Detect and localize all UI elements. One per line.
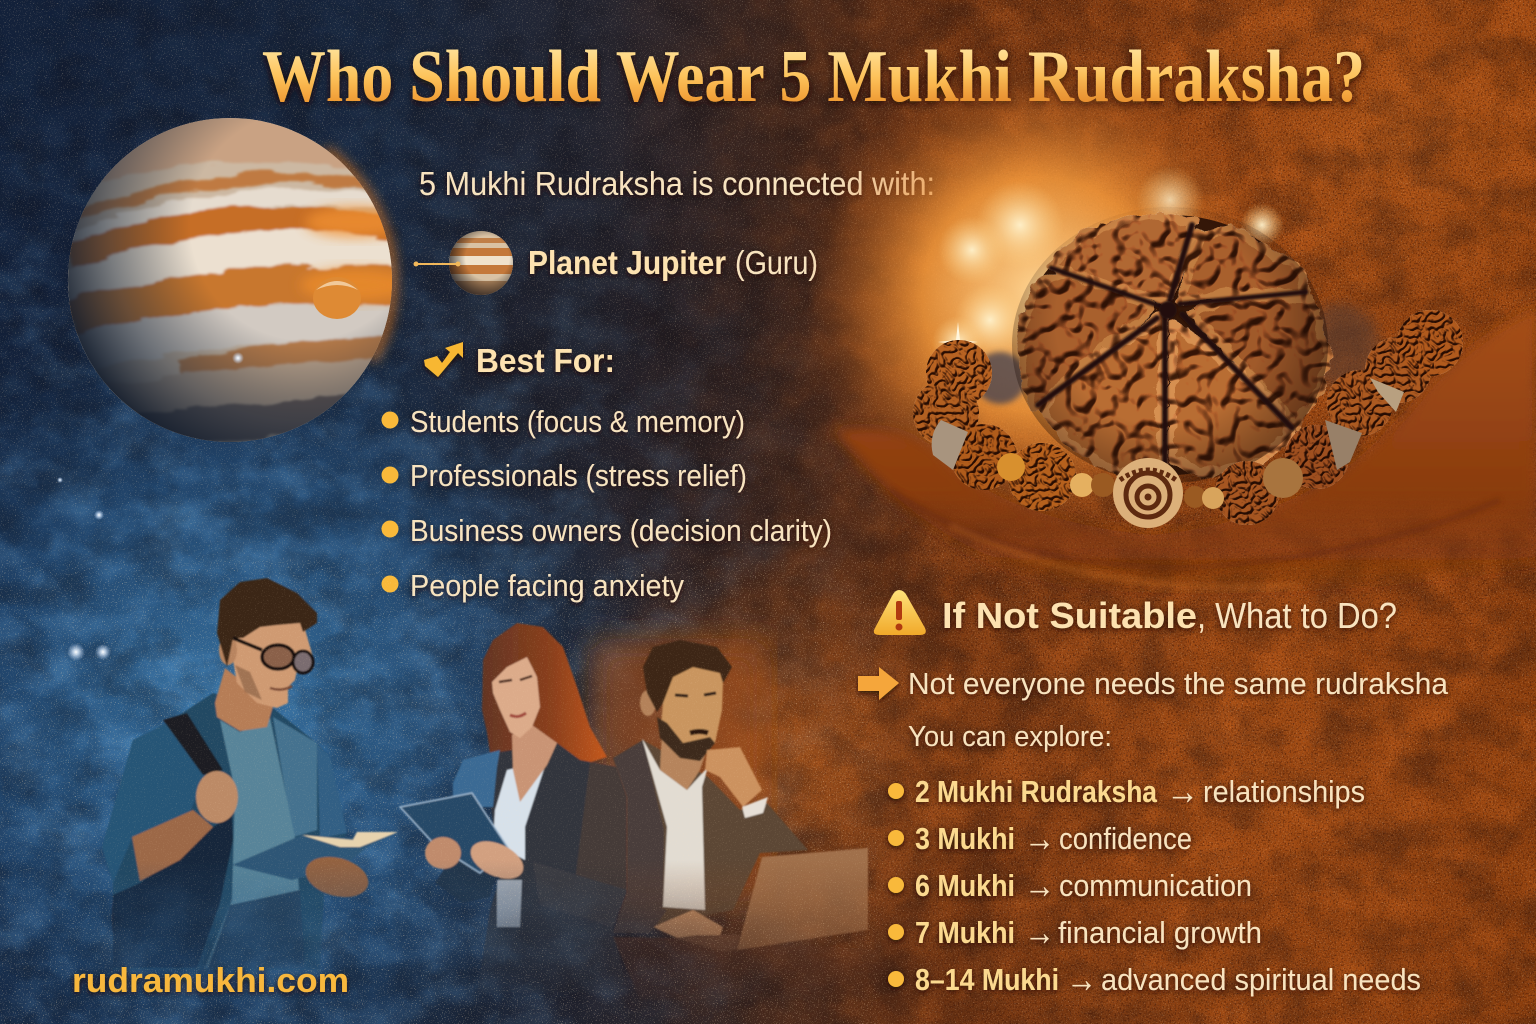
item: 2 mukhi: 2 Mukhi Rudraksha (915, 774, 1158, 809)
illustration: rudraksha bead on cloth (800, 60, 1536, 589)
heading: best for: Best For: (476, 342, 615, 379)
backpack (112, 905, 114, 929)
tablet (400, 793, 508, 873)
item: 7 mukhi: financial growth (1058, 915, 1262, 950)
blouse (493, 760, 547, 860)
heading: if not suitable (942, 595, 1397, 636)
desk (613, 937, 880, 1000)
t-shirt (205, 718, 305, 968)
text: planet Jupiter (Guru): (Guru) (735, 244, 818, 281)
item: 7 mukhi (888, 912, 1262, 954)
illustration: large planet Jupiter (60, 110, 410, 450)
item: students: Students (focus & memory) (410, 404, 745, 439)
hand holding book (304, 856, 369, 898)
item: 8-14 mukhi: 8–14 Mukhi (915, 962, 1059, 997)
item: 7 mukhi: → (1024, 912, 1055, 954)
item: 3 mukhi: → (1024, 818, 1055, 860)
item: 2 mukhi: → (1166, 771, 1199, 813)
item: 3 mukhi: confidence (1059, 821, 1192, 856)
neck (660, 730, 712, 790)
illustration: student with book (102, 578, 398, 970)
icon: best-for check mark (424, 342, 463, 377)
text: planet Jupiter (Guru): Planet Jupiter (528, 244, 726, 281)
student head (217, 578, 317, 708)
item: 2 mukhi: relationships (1203, 774, 1365, 809)
item: business owners: Business owners (decision clarity) (410, 513, 832, 548)
list: best for (382, 404, 832, 603)
neck (215, 668, 273, 731)
laptop (675, 848, 868, 952)
item: 6 mukhi: 6 Mukhi (915, 868, 1015, 903)
icon: small Jupiter with pointer (414, 231, 513, 295)
item: 8-14 mukhi (888, 959, 1421, 1001)
shirt (642, 738, 708, 910)
item: 6 mukhi (888, 865, 1252, 907)
rudraksha main bead (1012, 207, 1328, 483)
item: 7 mukhi: 7 Mukhi (915, 915, 1015, 950)
illustration: businesswoman with tablet (400, 623, 770, 993)
item: people facing anxiety: People facing anxiety (410, 568, 684, 603)
item: 8-14 mukhi: advanced spiritual needs (1101, 962, 1421, 997)
website url: rudramukhi.com (72, 962, 349, 1000)
item: professionals: Professionals (stress relief) (410, 458, 747, 493)
cloth (835, 310, 1536, 589)
illustration: businessman with laptop (613, 640, 880, 1000)
bead strand (913, 310, 1463, 528)
open book (232, 832, 398, 880)
intro text: 5 Mukhi Rudraksha is connected with: (419, 165, 935, 202)
blazer (477, 743, 627, 993)
item: 2 mukhi (888, 771, 1365, 813)
hands (425, 837, 461, 869)
strap (163, 713, 223, 775)
item: 3 mukhi: 3 Mukhi (915, 821, 1015, 856)
item: 3 mukhi (888, 818, 1192, 860)
text: you can explore: You can explore: (908, 721, 1112, 753)
fist (196, 771, 238, 823)
hair (481, 622, 608, 763)
item: 6 mukhi: → (1024, 865, 1055, 907)
man head (640, 640, 732, 761)
woman face (492, 657, 540, 738)
heading: if not suitable: , What to Do? (1197, 595, 1397, 636)
title: Who Should Wear 5 Mukhi Rudraksha? (262, 36, 1365, 118)
patterned centre bead (1113, 458, 1183, 528)
item: 6 mukhi: communication (1059, 868, 1252, 903)
arm (132, 810, 213, 881)
neck (512, 725, 557, 802)
jacket and sleeve (102, 693, 347, 970)
heading: if not suitable: If Not Suitable (942, 595, 1197, 636)
icon: warning triangle (874, 590, 926, 635)
hand at chin (705, 747, 762, 807)
icon: arrow (858, 667, 899, 700)
list: alternatives (888, 771, 1421, 1001)
glow behind bead (800, 60, 1380, 530)
blue sleeve (453, 750, 500, 807)
text: not everyone needs the same rudraksha: Not everyone needs the same rudraksha (908, 666, 1449, 701)
blazer (613, 740, 808, 933)
item: 8-14 mukhi: → (1066, 959, 1097, 1001)
hand on laptop (653, 910, 723, 938)
